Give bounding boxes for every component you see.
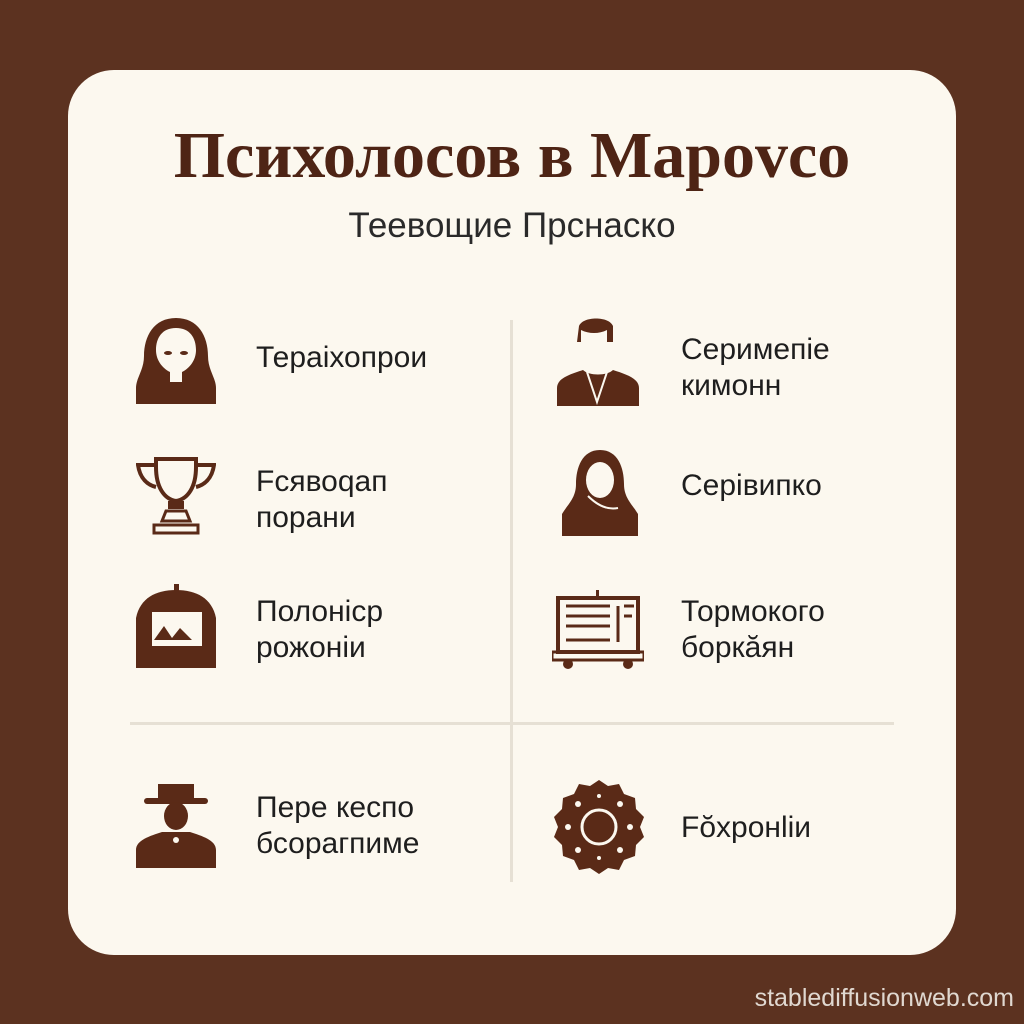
text 1: Тераіхопрои — [256, 341, 427, 374]
watermark: stablediffusionweb.com — [755, 984, 1014, 1012]
text 7: бсорагпиме — [256, 827, 420, 860]
text 4: кимонн — [681, 369, 781, 402]
icon: man — [557, 318, 639, 406]
icon: woman hood — [136, 318, 216, 404]
text 2: порани — [256, 501, 356, 534]
text 7 — [256, 791, 420, 860]
text 3: Полоніср — [256, 595, 383, 628]
icon: board — [552, 590, 644, 669]
text 4: Серимепіе — [681, 333, 830, 366]
text 3: рожоніи — [256, 631, 366, 664]
subtitle: Теевощие Прснаско — [348, 206, 676, 245]
dividers — [510, 320, 513, 882]
text 2 — [256, 465, 387, 534]
text 4 — [681, 333, 830, 402]
icon: sun badge — [554, 780, 644, 874]
text 6: боркӑян — [681, 631, 794, 664]
text 8: Fŏхронlіи — [681, 811, 811, 844]
text 6: Тормокого — [681, 595, 825, 628]
text 2: Fсявоqап — [256, 465, 387, 498]
card panel — [68, 70, 956, 955]
icon: trophy — [136, 457, 216, 534]
icon: man hat — [136, 784, 216, 868]
text 7: Пере кеспо — [256, 791, 414, 824]
icon: picture frame — [136, 584, 216, 668]
text 6 — [681, 595, 825, 664]
title: Психолосов в Мароvсо — [174, 119, 850, 192]
icon: woman hijab — [562, 450, 638, 536]
text 5: Серівипко — [681, 469, 822, 502]
text 3 — [256, 595, 383, 664]
